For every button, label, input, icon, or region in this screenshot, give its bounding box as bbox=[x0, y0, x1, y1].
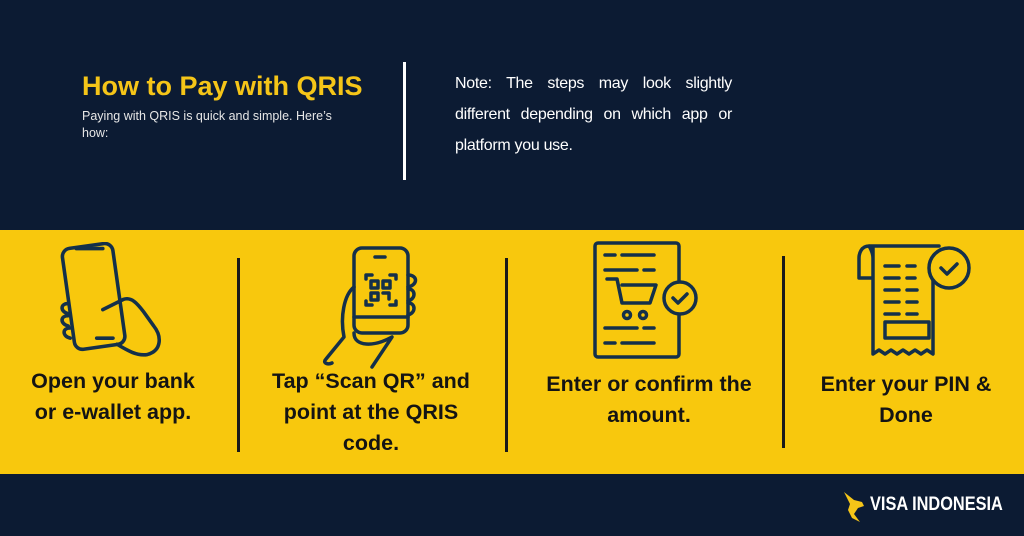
step 2 text: Tap “Scan QR” and point at the QRIS code. bbox=[272, 369, 470, 455]
divider 1 bbox=[237, 258, 240, 452]
icon: scan QR bbox=[322, 246, 418, 369]
step 1 text bbox=[31, 369, 195, 424]
step 3 text: Enter or confirm the amount. bbox=[546, 372, 752, 427]
icon: bird bbox=[844, 492, 864, 522]
title: How to Pay with QRIS bbox=[82, 71, 363, 101]
divider: header bbox=[403, 62, 406, 180]
divider 3 bbox=[782, 256, 785, 448]
logo: VISA INDONESIA bbox=[870, 494, 1003, 515]
note text: Note: The steps may look slightly different depending on which app or platform you use. bbox=[455, 75, 732, 154]
logo bbox=[844, 492, 1003, 522]
divider 2 bbox=[505, 258, 508, 452]
icon: cart document bbox=[593, 241, 698, 359]
panel: steps band bbox=[0, 230, 1024, 474]
subtitle: Paying with QRIS is quick and simple. Here’s how: bbox=[82, 109, 332, 140]
icon: phone in hand bbox=[60, 242, 161, 357]
step 1 text: or e-wallet app. bbox=[35, 400, 191, 424]
step 1 text: Open your bank bbox=[31, 369, 195, 393]
icon: receipt check bbox=[857, 244, 971, 356]
step 4 text: Enter your PIN & Done bbox=[821, 372, 991, 427]
